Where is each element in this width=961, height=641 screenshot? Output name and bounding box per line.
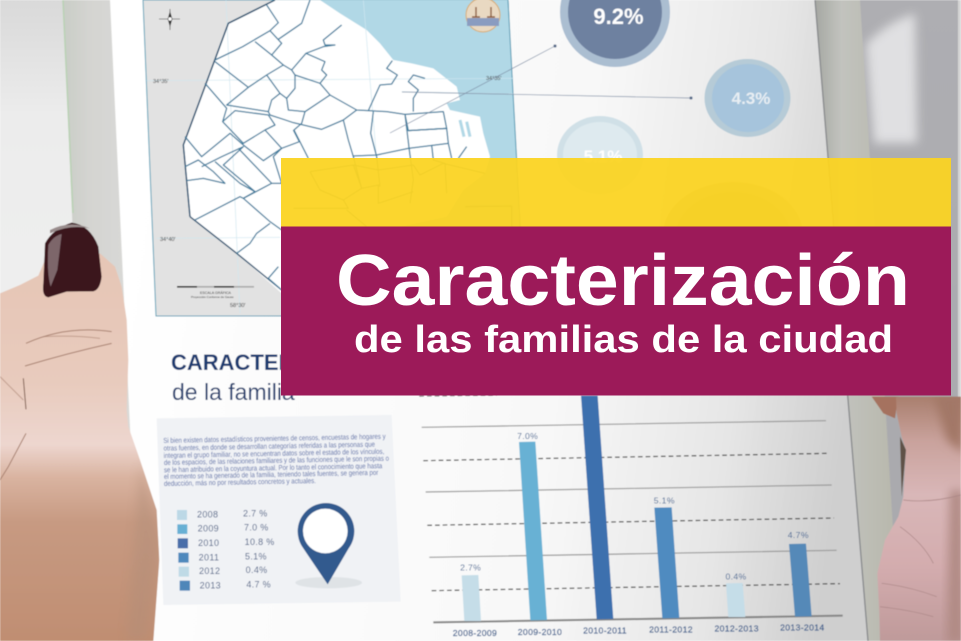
map coordinates: 34°40' bbox=[160, 237, 176, 243]
subtitle: de las familias de la ciudad bbox=[354, 319, 893, 361]
icon: fingernail bbox=[43, 223, 102, 297]
value labels: 7.0% bbox=[517, 431, 538, 441]
compass bbox=[159, 9, 180, 30]
legend: 2009 bbox=[198, 524, 219, 534]
category labels: 2009-2010 bbox=[518, 627, 562, 637]
article heading: de la familia bbox=[172, 379, 295, 405]
legend: 10.8 % bbox=[245, 537, 275, 547]
wall right bbox=[850, 0, 961, 641]
category labels bbox=[453, 622, 825, 638]
category labels: 2011-2012 bbox=[649, 624, 693, 634]
leader lines bbox=[390, 45, 692, 133]
bars bbox=[462, 396, 812, 621]
scale bar bbox=[177, 286, 254, 299]
tablet page bbox=[110, 0, 868, 641]
legend: 2.7 % bbox=[243, 508, 268, 518]
paragraph bbox=[163, 432, 389, 488]
icon: map pin bbox=[295, 503, 362, 588]
value labels: 4.7% bbox=[788, 530, 809, 540]
panel background bbox=[157, 415, 401, 605]
legend: 2008 bbox=[197, 509, 218, 519]
scale bar: Proyección Conforme de Gauss bbox=[191, 295, 234, 299]
bubble: 9.2%: 9.2% bbox=[593, 4, 644, 29]
paragraph: integran el grupo familiar, no se encuentran datos sobre el estado de los vínculos, bbox=[164, 447, 384, 460]
skin shading bbox=[136, 482, 154, 620]
bubble: 5.1% bbox=[557, 116, 643, 194]
legend: 7.0 % bbox=[244, 523, 269, 533]
map coordinates: 34°35' bbox=[153, 79, 168, 85]
map coordinates: 58°30' bbox=[230, 303, 246, 309]
tablet frame left bbox=[63, 0, 150, 641]
info panel bbox=[157, 415, 401, 605]
legend: 2011 bbox=[199, 552, 219, 562]
map coordinates: 34°35' bbox=[486, 76, 502, 82]
legend bbox=[177, 508, 275, 591]
city districts bbox=[147, 0, 513, 313]
value labels: 0.4% bbox=[725, 571, 747, 581]
grid lines bbox=[419, 395, 843, 622]
map coordinates bbox=[153, 76, 502, 309]
legend: 2013 bbox=[200, 580, 221, 590]
article heading bbox=[171, 350, 381, 405]
value labels: 2.7% bbox=[460, 562, 481, 572]
banner: yellow band bbox=[281, 158, 951, 227]
legend: 5.1% bbox=[245, 551, 267, 561]
left hand bbox=[0, 223, 167, 641]
article heading: CARACTERÍSTICAS bbox=[171, 350, 381, 375]
right hand bbox=[872, 393, 961, 641]
legend: 2010 bbox=[198, 538, 219, 548]
wall left bbox=[0, 0, 80, 641]
legend: 0.4% bbox=[246, 565, 267, 575]
title: Caracterización bbox=[336, 241, 910, 321]
water bbox=[300, 0, 521, 240]
value labels bbox=[460, 431, 809, 581]
paragraph: el momento se ha generado de la familia, teniendo tales fuentes, se genera por bbox=[164, 468, 379, 481]
category labels: 2013-2014 bbox=[780, 622, 825, 632]
legend: 4.7 % bbox=[246, 579, 271, 589]
paragraph: Si bien existen datos estadísticos provenientes de censos, encuestas de hogares y bbox=[163, 432, 386, 445]
paragraph: deducción, más no por resultados concretos y actuales. bbox=[164, 476, 316, 488]
scale bar: ESCALA GRÁFICA bbox=[200, 291, 232, 295]
bubble: 4.3% bbox=[704, 59, 790, 137]
bubble: 5.1%: 5.1% bbox=[584, 147, 622, 166]
category labels: 2008-2009 bbox=[453, 628, 497, 638]
paragraph: otras fuentes, en donde se desarrollan categorías referidas a las personas que bbox=[164, 440, 375, 453]
bar chart bbox=[419, 395, 843, 638]
skin creases bbox=[880, 495, 961, 617]
tablet frame right bbox=[815, 0, 900, 641]
map bbox=[143, 0, 692, 316]
finger creases bbox=[0, 330, 112, 480]
paragraph: de los espacios, de las relaciones familiares y de las funciones que le son propias o bbox=[164, 454, 389, 467]
bubble: hidden under banner bbox=[663, 182, 803, 286]
seal bbox=[466, 0, 500, 32]
bubble: 4.3%: 4.3% bbox=[732, 89, 770, 108]
bubble: 9.2% bbox=[560, 0, 670, 67]
paragraph: se le han atribuido en la coyuntura actual. Por lo tanto el conocimiento que hasta bbox=[164, 461, 383, 474]
legend: 2012 bbox=[199, 566, 220, 576]
category labels: 2010-2011 bbox=[583, 626, 627, 636]
harbour docks bbox=[460, 120, 470, 137]
value labels: 5.1% bbox=[654, 496, 675, 506]
map background bbox=[143, 0, 522, 316]
banner: purple band bbox=[281, 226, 951, 396]
category labels: 2012-2013 bbox=[714, 623, 759, 633]
